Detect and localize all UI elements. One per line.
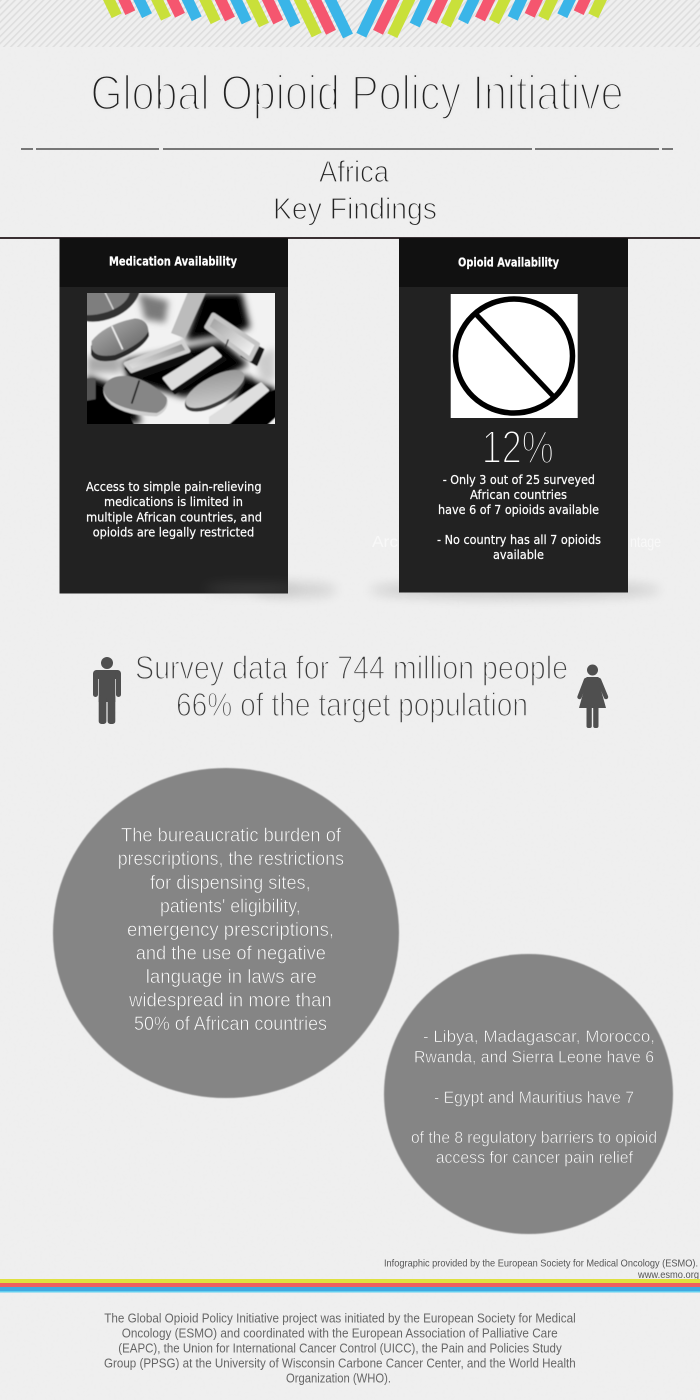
subtitle: Key Findings: Key Findings bbox=[273, 191, 437, 226]
survey headline, line 2: 66% of the target population bbox=[176, 686, 528, 723]
footer paragraph: Group (PPSG) at the University of Wisconsin Carbone Cancer Center, and the World Health bbox=[104, 1357, 576, 1371]
left chevron bars bbox=[90, 0, 348, 36]
pill: bottom left bbox=[103, 378, 168, 416]
panel body text: have 6 of 7 opioids available bbox=[438, 503, 599, 517]
callout text: prescriptions, the restrictions bbox=[118, 848, 344, 870]
callout circle: bureaucratic burden bbox=[53, 768, 399, 1098]
faint text behind panel, left fragment: Arc bbox=[372, 534, 398, 551]
footer paragraph: Oncology (ESMO) and coordinated with the European Association of Palliative Care bbox=[122, 1327, 558, 1341]
survey headline, line 1: Survey data for 744 million people bbox=[135, 649, 568, 686]
panel body text: Access to simple pain-relieving bbox=[86, 480, 262, 494]
callout text: for dispensing sites, bbox=[150, 872, 311, 894]
callout text: emergency prescriptions, bbox=[127, 919, 334, 941]
callout text bbox=[411, 1028, 657, 1167]
photo: white tablets bbox=[85, 291, 278, 426]
panel header bbox=[60, 238, 288, 287]
striped top band bbox=[0, 0, 700, 47]
panel heading: Opioid Availability bbox=[458, 256, 559, 270]
callout text: and the use of negative bbox=[136, 942, 326, 964]
panel: opioid availability bbox=[399, 238, 628, 592]
section rule bbox=[0, 237, 700, 239]
icon: woman bbox=[579, 664, 606, 728]
faint text behind panel, right fragment: ntage bbox=[630, 534, 661, 551]
light streak at panel foot bbox=[204, 585, 300, 593]
panel heading: Medication Availability bbox=[109, 254, 237, 268]
right chevron bars bbox=[361, 0, 620, 36]
footer paragraph: Organization (WHO). bbox=[286, 1372, 391, 1386]
pill: top left bbox=[85, 291, 140, 322]
statistic: 12%: 12% bbox=[482, 421, 554, 473]
callout text: - Egypt and Mauritius have 7 bbox=[434, 1089, 634, 1107]
footer paragraph bbox=[104, 1312, 576, 1386]
callout text: widespread in more than bbox=[128, 990, 332, 1012]
pill: bottom right bbox=[210, 384, 268, 426]
panel body text: - No country has all 7 opioids bbox=[437, 533, 601, 547]
callout text: Rwanda, and Sierra Leone have 6 bbox=[414, 1049, 654, 1067]
panel body text: - Only 3 out of 25 surveyed bbox=[443, 473, 595, 487]
pill: upright bar bbox=[171, 291, 207, 338]
footer paragraph: The Global Opioid Policy Initiative project was initiated by the European Society for Medical bbox=[104, 1312, 576, 1326]
colour stripe bbox=[0, 1279, 700, 1292]
pill: middle bar bbox=[164, 348, 225, 393]
callout text: of the 8 regulatory barriers to opioid bbox=[411, 1129, 657, 1147]
icon: man bbox=[93, 657, 121, 724]
panel body text bbox=[437, 473, 601, 562]
panel body text: available bbox=[493, 548, 544, 562]
icon: prohibition sign bbox=[451, 294, 578, 418]
footer paragraph: (EAPC), the Union for International Cancer Control (UICC), the Pain and Policies Study bbox=[118, 1342, 562, 1356]
callout text: patients' eligibility, bbox=[160, 896, 301, 918]
pill: left bbox=[91, 322, 149, 361]
panel body text: multiple African countries, and bbox=[86, 510, 262, 524]
panel shadows bbox=[253, 582, 661, 598]
callout text: - Libya, Madagascar, Morocco, bbox=[423, 1028, 655, 1046]
callout circle: regulatory barriers bbox=[384, 954, 673, 1234]
callout text: language in laws are bbox=[146, 966, 317, 988]
callout text bbox=[118, 825, 344, 1035]
panel body text bbox=[86, 480, 262, 540]
callout text: The bureaucratic burden of bbox=[121, 825, 342, 847]
pill: right tablet bbox=[207, 315, 263, 365]
credit line bbox=[384, 1258, 699, 1281]
panel: medication availability bbox=[60, 238, 300, 594]
pill: centre bar bbox=[126, 342, 192, 378]
panel body text: medications is limited in bbox=[104, 495, 243, 509]
callout text: 50% of African countries bbox=[134, 1013, 327, 1035]
header divider bbox=[21, 148, 673, 150]
subtitle: Africa: Africa bbox=[319, 154, 390, 189]
panel body text: opioids are legally restricted bbox=[93, 526, 254, 540]
callout text: access for cancer pain relief bbox=[436, 1149, 633, 1167]
pill: oval bbox=[179, 364, 251, 420]
panel body text: African countries bbox=[470, 488, 567, 502]
panel header bbox=[399, 238, 628, 287]
